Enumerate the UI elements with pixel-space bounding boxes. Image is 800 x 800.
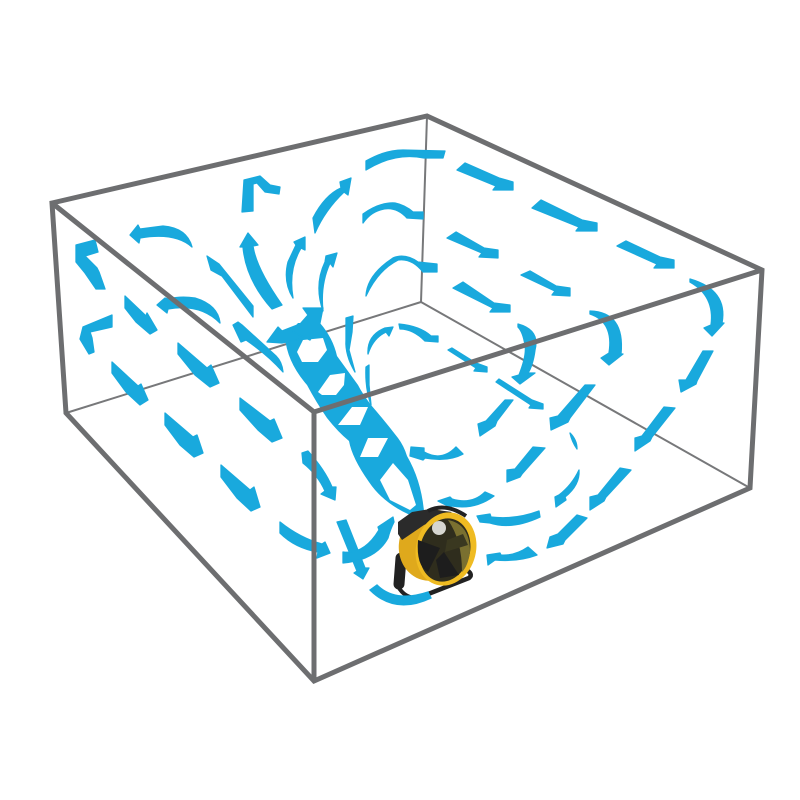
arrow: top-left arc 2 — [157, 297, 220, 323]
arrow: crescent 3 into fan — [477, 511, 540, 525]
arrow: ceiling right row 2a — [447, 232, 498, 258]
arrow: crescent 4 into fan — [487, 547, 537, 565]
arrow: back arc 5 — [399, 324, 438, 342]
arrow: left diagonal 2 — [112, 362, 148, 405]
arrow: return diagonal 2 — [635, 407, 675, 451]
arrow: left wall hook 2 — [80, 315, 112, 354]
arrow: return diagonal 6 — [478, 400, 513, 436]
arrow: fan out 5 — [319, 253, 337, 311]
fan interior — [413, 513, 477, 587]
arrow: return curve — [555, 470, 579, 507]
arrow: floor left 2 — [302, 451, 336, 500]
arrow: fan out 4 — [313, 178, 351, 233]
arrow: back arc 3 — [366, 256, 437, 296]
fan stand — [397, 552, 471, 598]
arrow: left diagonal 5 — [165, 413, 203, 457]
arrow: top-left arc 1 — [130, 225, 192, 247]
arrow: left diagonal 4 — [240, 398, 282, 442]
arrow: ceiling right row 1b — [532, 200, 597, 231]
fan housing — [391, 502, 471, 588]
motor highlight — [432, 521, 446, 535]
arrow: thin sliver 2 — [366, 365, 371, 405]
arrow: curved right 1 — [690, 279, 724, 336]
carry handle — [428, 507, 466, 516]
arrow: back arc 2 — [363, 203, 423, 223]
icon: yellow drum fan — [391, 502, 484, 598]
arrow: ceiling right row 3a — [453, 282, 510, 312]
arrow: fan intake curve — [343, 517, 394, 563]
arrow: left diagonal 1 — [125, 296, 157, 334]
top control box — [398, 509, 452, 540]
arrow: far wall thin 1 — [448, 348, 487, 372]
arrow: return diagonal 7 — [507, 447, 545, 482]
arrow: curved right 3 — [512, 324, 536, 384]
arrow: fan out 1 — [240, 233, 282, 309]
arrow: sliver — [570, 433, 577, 449]
fan blades — [418, 534, 468, 578]
arrow: return diagonal 4 — [547, 515, 587, 548]
arrow: left wall hook 1 — [76, 240, 105, 289]
arrow: under-fan curve — [370, 585, 431, 605]
arrow: crescent 2 into fan — [438, 492, 494, 507]
arrow: crescent 1 — [410, 447, 463, 460]
room box: front edges — [52, 116, 762, 681]
arrow: ceiling right row 1a — [457, 163, 513, 190]
arrow: ceiling right row 2b — [521, 271, 570, 296]
arrow: floor left 1 — [280, 522, 330, 558]
arrow: top hook — [242, 176, 280, 212]
arrow: fan out 3 — [286, 237, 305, 298]
arrow: back arc 1 — [366, 150, 445, 170]
twisted jet of air from fan — [267, 308, 424, 515]
arrow: fan out 2 — [207, 256, 253, 317]
room box: back edges — [66, 116, 750, 488]
arrow: ceiling right row 1c — [617, 241, 674, 268]
arrow: return diagonal 5 — [550, 385, 595, 430]
arrow: back arc 4 — [368, 327, 393, 354]
arrow: thin sliver 1 — [346, 316, 355, 372]
airflow arrows — [76, 150, 724, 579]
arrow: left diagonal 3 — [178, 343, 219, 387]
fan front ring — [408, 506, 484, 592]
arrow: curved right 2 — [590, 311, 623, 365]
arrow: fan out 6 — [233, 322, 283, 372]
arrow: floor left 3 — [337, 520, 369, 579]
arrow: far wall thin 2 — [496, 379, 543, 409]
olive fan shroud highlight — [448, 520, 470, 572]
arrow: left diagonal 6 — [221, 465, 260, 511]
arrow: return diagonal 1 — [679, 351, 713, 392]
arrow: return diagonal 3 — [590, 468, 631, 510]
